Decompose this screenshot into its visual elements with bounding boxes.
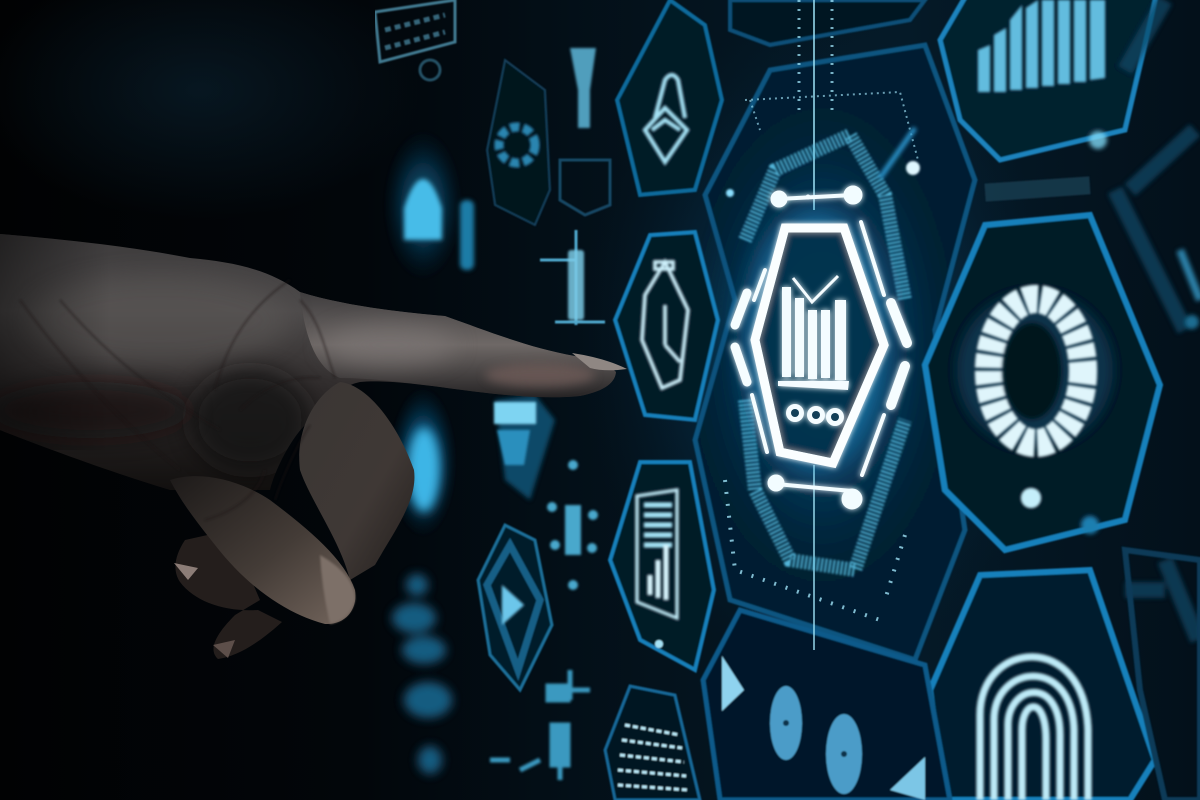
top connector bar bbox=[771, 186, 862, 207]
panel: right hexagon with ring bbox=[925, 215, 1160, 550]
icon: triangle bbox=[722, 656, 744, 711]
fingernail: little finger bbox=[213, 640, 235, 658]
lower fingers bbox=[175, 530, 282, 659]
central icon: outlines and glowing hexagon bbox=[725, 0, 920, 650]
icon: gear bbox=[487, 60, 550, 225]
icon: disc one bbox=[770, 686, 802, 760]
panel: right edge hexagons bbox=[1115, 0, 1200, 800]
icon: triangle two bbox=[890, 757, 925, 800]
curled middle finger bbox=[299, 382, 414, 580]
panel: large centre hexagon bbox=[687, 45, 975, 660]
icon: clock bbox=[642, 262, 688, 388]
panel: bottom centre hexagon bbox=[703, 610, 950, 800]
icon: play bbox=[478, 525, 552, 690]
main hexagon outline bbox=[755, 228, 884, 463]
glowing side segments bbox=[735, 222, 907, 475]
icon: bar chart bbox=[778, 276, 849, 426]
bottom connector bar bbox=[768, 475, 862, 509]
icon: antenna bbox=[540, 230, 605, 325]
hand bbox=[0, 230, 630, 659]
icon: report sheet bbox=[637, 490, 677, 618]
panel: lower chart hexagon bbox=[610, 462, 714, 670]
panel: top left small hexagons bbox=[617, 0, 925, 195]
panel: middle clock hexagon bbox=[615, 232, 718, 420]
fingernail: lower finger bbox=[174, 563, 198, 580]
back of hand and index finger bbox=[0, 230, 630, 500]
icon: funnel bbox=[570, 48, 596, 128]
icon: network nodes bbox=[547, 460, 598, 590]
panel: blurred left icons below finger bbox=[389, 387, 598, 780]
thumb bbox=[170, 476, 355, 624]
glints bbox=[906, 161, 920, 175]
thumb nail bbox=[320, 555, 355, 624]
dotted circuit frame bbox=[745, 135, 905, 570]
panel: top right hexagon with bar chart bbox=[940, 0, 1160, 202]
panel: far left dim icons bbox=[375, 0, 610, 325]
fingernail bbox=[572, 353, 627, 370]
icon: disc two bbox=[826, 714, 862, 794]
dotted vertical beam bbox=[725, 0, 918, 650]
panel: bottom hexagon with text dots bbox=[605, 686, 700, 800]
icon: badge bbox=[645, 75, 687, 162]
panel group: hexagon lattice bbox=[375, 0, 1200, 800]
panel: bottom right hexagon with fingerprint bbox=[930, 570, 1155, 800]
icon: blurred bell bbox=[383, 130, 463, 280]
skin creases bbox=[20, 280, 335, 520]
icon: stacked blurred items bbox=[392, 574, 452, 774]
